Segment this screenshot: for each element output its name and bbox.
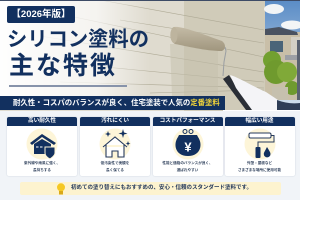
description	[100, 160, 129, 172]
card: versatile	[224, 117, 294, 176]
description: 選ばれやすい	[177, 168, 198, 172]
description: 外壁・屋根など	[247, 160, 272, 164]
heading: 高い耐久性	[28, 118, 56, 124]
title underline	[9, 85, 127, 86]
card: cost performance	[152, 117, 222, 176]
roller	[223, 47, 226, 76]
heading: 汚れにくい	[101, 118, 129, 124]
house	[265, 32, 300, 100]
description	[24, 160, 60, 172]
title line 1: シリコン塗料の	[7, 29, 149, 51]
hero photo	[0, 0, 300, 111]
card: stain resistant	[80, 117, 150, 176]
glove	[223, 75, 253, 110]
icon: house with shield	[26, 128, 58, 160]
icon: paint roller and drop	[244, 128, 276, 160]
heading: 幅広い用途	[246, 118, 273, 124]
title line 2: 主な特徴	[9, 52, 117, 80]
heading	[7, 117, 77, 126]
year tag: 【2026年版】	[11, 9, 71, 20]
description: 低汚染性で美観を	[101, 160, 129, 164]
heading	[224, 117, 294, 126]
icon: light bulb	[57, 183, 65, 194]
description	[162, 160, 213, 172]
content background	[0, 111, 300, 200]
icon: sparkling house	[100, 128, 130, 160]
card: high durability	[7, 117, 77, 176]
heading	[152, 117, 222, 126]
callout text: 初めての塗り替えにもおすすめの、安心・信頼のスタンダード塗料です。	[71, 185, 252, 191]
description: 長く保てる	[106, 168, 124, 172]
description: 長持ちする	[33, 168, 51, 172]
icon: coin purse with yen: ¥	[184, 140, 192, 154]
footer callout	[20, 182, 281, 194]
bush	[263, 51, 281, 69]
description: 紫外線や雨風に強く、	[24, 160, 60, 164]
description: さまざまな場所に使用可能	[238, 168, 281, 172]
paint shade	[170, 44, 218, 96]
year tag	[7, 6, 75, 23]
icon: coin purse with yen	[172, 128, 204, 160]
description	[238, 160, 281, 172]
banner: 耐久性・コスパのバランスが良く、住宅塗装で人気の定番塗料	[13, 98, 220, 107]
banner	[0, 96, 225, 110]
heading: コストパフォーマンス	[160, 118, 215, 124]
heading	[80, 117, 150, 126]
description: 性能と価格のバランスが良く、	[162, 160, 213, 164]
